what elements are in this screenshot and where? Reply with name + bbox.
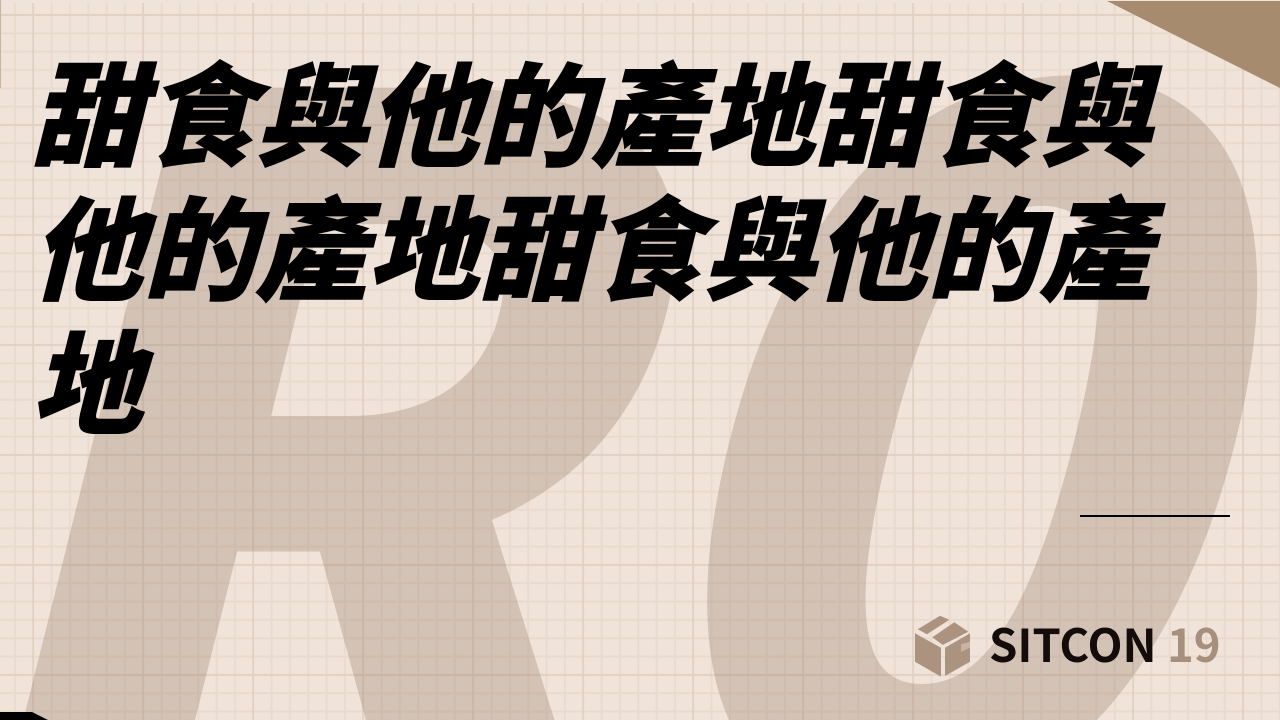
corner triangle [1107, 1, 1280, 88]
divider rule [1080, 515, 1230, 517]
logo: SITCON 19 [915, 610, 1221, 677]
bottom-left corner mark [0, 712, 48, 720]
title [31, 28, 1166, 458]
title: 甜食與他的產地甜食與 [31, 28, 1151, 190]
title: 他的產地甜食與他的產 [31, 162, 1151, 324]
title: 地 [31, 296, 143, 458]
logo wordmark: SITCON 19 [989, 610, 1221, 676]
icon: cardboard box [915, 616, 970, 677]
